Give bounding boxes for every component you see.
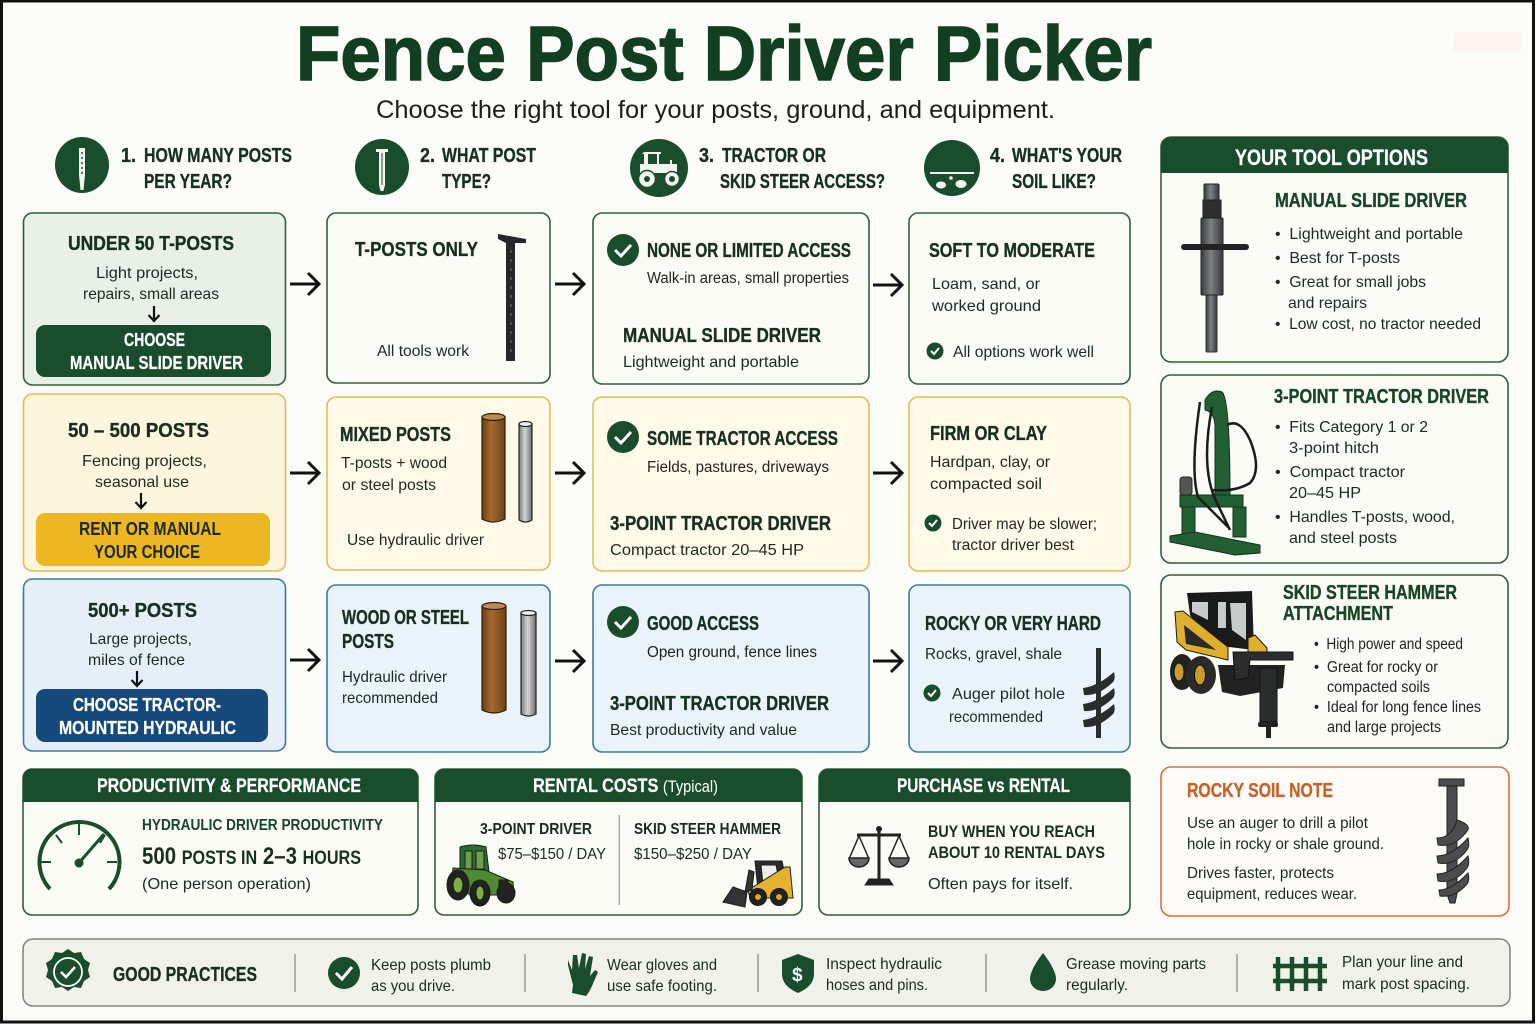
step 3 label: TRACTOR OR <box>722 145 826 167</box>
panel: firm or clay: FIRM OR CLAY <box>930 423 1048 445</box>
icon: steel post <box>521 610 536 716</box>
icon: check <box>328 957 360 989</box>
panel: some tractor access: SOME TRACTOR ACCESS <box>647 428 838 450</box>
panel: rocky soil note: Drives faster, protects <box>1187 865 1334 882</box>
panel: your tool options, manual slide driver: • Great for small jobs <box>1275 274 1426 291</box>
panel: mixed posts <box>327 397 550 570</box>
panel: none or limited access: Walk-in areas, small properties <box>647 270 849 287</box>
icon: green tractor <box>447 845 515 906</box>
panel: mixed posts: Use hydraulic driver <box>347 532 485 549</box>
icon: wood post <box>482 414 505 522</box>
icon: auger <box>1437 779 1469 903</box>
icon: steel post <box>519 422 532 522</box>
panel: rocky soil note: equipment, reduces wear. <box>1187 886 1357 903</box>
panel: rocky or very hard: Rocks, gravel, shale <box>925 646 1062 663</box>
panel: under 50 t-posts: repairs, small areas <box>83 286 219 303</box>
panel: good practices: mark post spacing. <box>1342 976 1470 993</box>
panel: 50-500 posts: 50 – 500 POSTS <box>68 420 209 442</box>
icon: scales <box>849 826 909 885</box>
panel: rocky or very hard: recommended <box>949 709 1043 726</box>
panel: good practices: Plan your line and <box>1342 954 1463 971</box>
panel: 3-point tractor driver: and steel posts <box>1289 530 1397 547</box>
icon: wood post <box>482 602 506 713</box>
panel: purchase vs rental: Often pays for itself. <box>928 876 1073 893</box>
panel: rental costs: 3-POINT DRIVER <box>480 821 592 838</box>
step 1 label: 1. <box>121 145 136 167</box>
panel: firm or clay <box>909 397 1130 571</box>
panel: none or limited access: Lightweight and portable <box>623 354 799 371</box>
panel: 50-500 posts: seasonal use <box>95 474 189 491</box>
panel: 500+ posts: miles of fence <box>88 652 185 669</box>
panel: good practices <box>23 939 1510 1006</box>
icon: t-post <box>355 139 409 195</box>
panel: mixed posts: MIXED POSTS <box>340 424 451 446</box>
step 2 label: TYPE? <box>442 171 491 193</box>
icon: post <box>55 137 109 193</box>
panel: skid steer hammer attachment: • High power and speed <box>1314 636 1463 653</box>
heading: your tool options: YOUR TOOL OPTIONS <box>1235 145 1428 170</box>
icon: t-post <box>498 234 526 361</box>
panel: 50-500 posts <box>24 394 286 571</box>
arrows row 3 <box>290 649 902 672</box>
panel: good practices: Wear gloves and <box>607 957 717 974</box>
panel: under 50 t-posts: UNDER 50 T-POSTS <box>68 233 234 255</box>
panel: 3-point tractor driver: 20–45 HP <box>1289 485 1361 502</box>
panel: some tractor access: 3-POINT TRACTOR DRIVER <box>610 513 831 535</box>
panel: mixed posts: T-posts + wood <box>341 455 447 472</box>
step 2 header <box>355 139 536 195</box>
panel: firm or clay: Hardpan, clay, or <box>930 454 1051 471</box>
step 1 header <box>55 137 292 193</box>
panel: under 50 t-posts: Light projects, <box>96 265 198 282</box>
panel: good access: Open ground, fence lines <box>647 644 817 661</box>
step 2 label: 2. <box>420 145 435 167</box>
panel: none or limited access: NONE OR LIMITED ACCESS <box>647 240 851 262</box>
panel: mixed posts: or steel posts <box>342 477 436 494</box>
panel: 3-point tractor driver: 3-POINT TRACTOR DRIVER <box>1274 386 1489 408</box>
panel: wood or steel posts: Hydraulic driver <box>342 669 448 686</box>
panel: some tractor access <box>593 397 869 571</box>
panel: good access: GOOD ACCESS <box>647 613 759 635</box>
panel: skid steer hammer attachment: • Great for rocky or <box>1314 659 1438 676</box>
step 4 label: 4. <box>990 145 1005 167</box>
panel: purchase vs rental: ABOUT 10 RENTAL DAYS <box>928 843 1105 862</box>
panel: good access: 3-POINT TRACTOR DRIVER <box>610 693 829 715</box>
panel: wood or steel posts: WOOD OR STEEL <box>342 607 469 629</box>
panel: your tool options, manual slide driver: • Best for T-posts <box>1275 250 1400 267</box>
step 3 header <box>630 139 885 197</box>
arrows row 2 <box>290 462 902 484</box>
panel: firm or clay: tractor driver best <box>952 537 1075 554</box>
panel: good practices: hoses and pins. <box>826 977 928 994</box>
panel: some tractor access: Fields, pastures, driveways <box>647 459 829 476</box>
panel: 500+ posts: Large projects, <box>89 631 192 648</box>
button: choose tractor-mounted: MOUNTED HYDRAULIC <box>59 717 236 738</box>
panel: good access: Best productivity and value <box>610 722 797 739</box>
panel: productivity and performance: PRODUCTIVITY & PERFORMANCE <box>97 776 361 797</box>
panel: good practices: regularly. <box>1066 977 1128 994</box>
panel: your tool options, manual slide driver: • Lightweight and portable <box>1275 226 1463 243</box>
panel: purchase vs rental <box>819 769 1130 915</box>
panel: good access <box>593 585 869 752</box>
panel: rental costs <box>435 769 802 915</box>
panel: rocky or very hard: ROCKY OR VERY HARD <box>925 613 1101 635</box>
icon: auger <box>1083 648 1115 738</box>
panel: skid steer hammer attachment: and large projects <box>1327 719 1441 736</box>
step 3 label: 3. <box>699 145 714 167</box>
panel: rocky soil note <box>1161 767 1509 916</box>
panel: good practices: Keep posts plumb <box>371 957 491 974</box>
icon: small skid steer <box>723 861 793 907</box>
button: rent or manual: RENT OR MANUAL <box>79 518 221 539</box>
arrows row 1 <box>290 273 902 296</box>
icon: shield <box>782 954 814 993</box>
panel: productivity and performance: (One person operation) <box>142 876 311 893</box>
panel: productivity and performance: HYDRAULIC DRIVER PRODUCTIVITY <box>142 817 383 834</box>
panel: some tractor access: Compact tractor 20–45 HP <box>610 542 804 559</box>
panel: 3-point tractor driver: 3-point hitch <box>1289 440 1379 457</box>
step 3 label: SKID STEER ACCESS? <box>720 171 885 193</box>
panel: 3-point tractor driver: • Compact tractor <box>1275 464 1406 481</box>
panel: rocky soil note: ROCKY SOIL NOTE <box>1187 780 1333 802</box>
step 1 label: HOW MANY POSTS <box>144 145 292 167</box>
panel: skid steer hammer attachment <box>1161 575 1508 748</box>
panel: purchase vs rental: BUY WHEN YOU REACH <box>928 822 1095 841</box>
panel: rental costs: $150–$250 / DAY <box>634 846 752 863</box>
panel: productivity and performance: 500 POSTS IN 2–3 HOURS <box>142 843 361 870</box>
icon: drop <box>1030 953 1056 991</box>
button: choose manual: CHOOSE <box>124 329 185 350</box>
panel: soft to moderate: worked ground <box>931 298 1041 315</box>
step 1 label: PER YEAR? <box>144 171 232 193</box>
panel: rocky or very hard: Auger pilot hole <box>952 686 1065 703</box>
panel: good practices: Inspect hydraulic <box>826 956 942 973</box>
panel: rocky soil note: Use an auger to drill a pilot <box>1187 815 1369 832</box>
icon: skid steer with hammer <box>1170 591 1293 738</box>
panel: wood or steel posts <box>327 585 550 752</box>
panel: soft to moderate: SOFT TO MODERATE <box>929 240 1095 262</box>
panel: wood or steel posts: recommended <box>342 690 438 707</box>
button: rent or manual: YOUR CHOICE <box>94 541 200 562</box>
icon: fence <box>1273 957 1327 991</box>
icon: badge <box>46 949 90 991</box>
panel: good practices: Grease moving parts <box>1066 956 1206 973</box>
step 4 label: WHAT'S YOUR <box>1012 145 1122 167</box>
icon: manual slide driver <box>1181 184 1249 352</box>
panel: none or limited access: MANUAL SLIDE DRIVER <box>623 325 821 347</box>
button: rent or manual <box>36 513 270 566</box>
panel: soft to moderate: All options work well <box>953 344 1094 361</box>
panel: your tool options, manual slide driver <box>1161 137 1508 362</box>
panel: soft to moderate: Loam, sand, or <box>932 276 1041 293</box>
panel: rocky or very hard <box>909 585 1130 752</box>
step 2 label: WHAT POST <box>442 145 536 167</box>
panel: your tool options, manual slide driver: • Low cost, no tractor needed <box>1275 316 1481 333</box>
panel: productivity and performance <box>23 769 418 915</box>
panel: good practices: as you drive. <box>371 978 455 995</box>
panel: rental costs: RENTAL COSTS (Typical) <box>533 776 718 797</box>
panel: skid steer hammer attachment: ATTACHMENT <box>1283 603 1393 625</box>
panel: t-posts only <box>327 213 550 383</box>
button: choose manual <box>36 325 271 377</box>
subtitle: Choose the right tool for your posts, ground, and equipment. <box>376 96 1055 124</box>
panel: wood or steel posts: POSTS <box>342 631 394 653</box>
panel: under 50 t-posts <box>24 213 286 385</box>
button: choose tractor-mounted: CHOOSE TRACTOR- <box>73 694 221 715</box>
panel: rental costs: SKID STEER HAMMER <box>634 821 781 838</box>
step 4 header <box>924 140 1122 196</box>
panel: good practices: use safe footing. <box>607 978 717 995</box>
icon: shield: $ <box>792 965 803 986</box>
panel: firm or clay: Driver may be slower; <box>952 516 1097 533</box>
icon: tractor driver frame <box>1170 391 1260 555</box>
panel: your tool options, manual slide driver: and repairs <box>1288 295 1367 312</box>
panel: soft to moderate <box>909 213 1130 384</box>
panel: none or limited access <box>593 213 869 384</box>
panel: skid steer hammer attachment: • Ideal for long fence lines <box>1314 699 1481 716</box>
panel: t-posts only: All tools work <box>377 343 470 360</box>
step 4 label: SOIL LIKE? <box>1012 171 1096 193</box>
icon: gauge <box>40 822 119 889</box>
panel: firm or clay: compacted soil <box>930 476 1042 493</box>
panel: skid steer hammer attachment: compacted soils <box>1327 679 1430 696</box>
panel: 500+ posts: 500+ POSTS <box>88 600 197 622</box>
panel: 3-point tractor driver: • Fits Category 1 or 2 <box>1275 419 1428 436</box>
icon: glove <box>568 953 598 996</box>
panel: 3-point tractor driver: • Handles T-posts, wood, <box>1275 509 1455 526</box>
icon: soil <box>924 140 980 196</box>
panel: t-posts only: T-POSTS ONLY <box>355 239 479 261</box>
panel: 3-point tractor driver <box>1161 375 1508 563</box>
button: choose manual: MANUAL SLIDE DRIVER <box>70 352 243 373</box>
panel: skid steer hammer attachment: SKID STEER HAMMER <box>1283 582 1457 604</box>
title: Fence Post Driver Picker <box>296 11 1152 97</box>
panel: 50-500 posts: Fencing projects, <box>82 453 207 470</box>
panel: 500+ posts <box>24 579 286 751</box>
panel: rental costs: $75–$150 / DAY <box>498 846 606 863</box>
button: choose tractor-mounted <box>36 689 268 742</box>
panel: your tool options, manual slide driver: MANUAL SLIDE DRIVER <box>1275 190 1467 212</box>
icon: tractor <box>630 139 688 197</box>
panel: purchase vs rental: PURCHASE vs RENTAL <box>897 776 1070 797</box>
panel: rocky soil note: hole in rocky or shale ground. <box>1187 836 1384 853</box>
panel: good practices: GOOD PRACTICES <box>113 964 257 986</box>
